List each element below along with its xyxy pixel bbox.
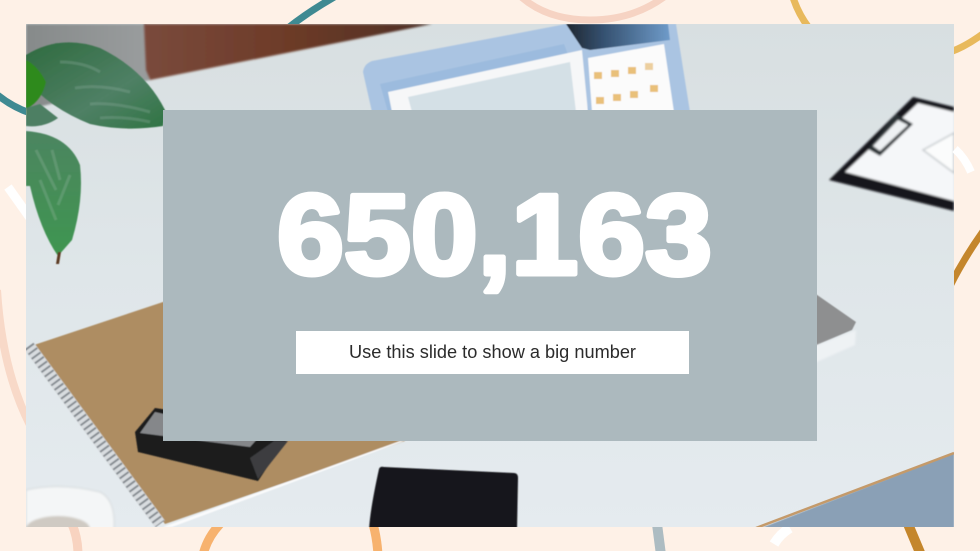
table edge <box>756 453 954 528</box>
caption box <box>296 331 689 374</box>
coffee cup <box>26 488 113 527</box>
big number: 650,163 <box>277 172 712 299</box>
laptop base <box>817 294 856 346</box>
white accent stroke <box>955 149 971 172</box>
notebook <box>29 298 405 527</box>
laptop screen <box>363 24 690 112</box>
chair <box>144 24 432 80</box>
hard drive <box>135 408 300 481</box>
plant <box>26 42 165 264</box>
phone <box>369 467 518 530</box>
number panel <box>163 110 817 441</box>
back wall <box>26 24 150 110</box>
floor <box>756 453 954 530</box>
clipboard <box>829 97 954 211</box>
caption text: Use this slide to show a big number <box>349 342 636 362</box>
caption <box>296 331 689 374</box>
panel background <box>163 110 817 441</box>
